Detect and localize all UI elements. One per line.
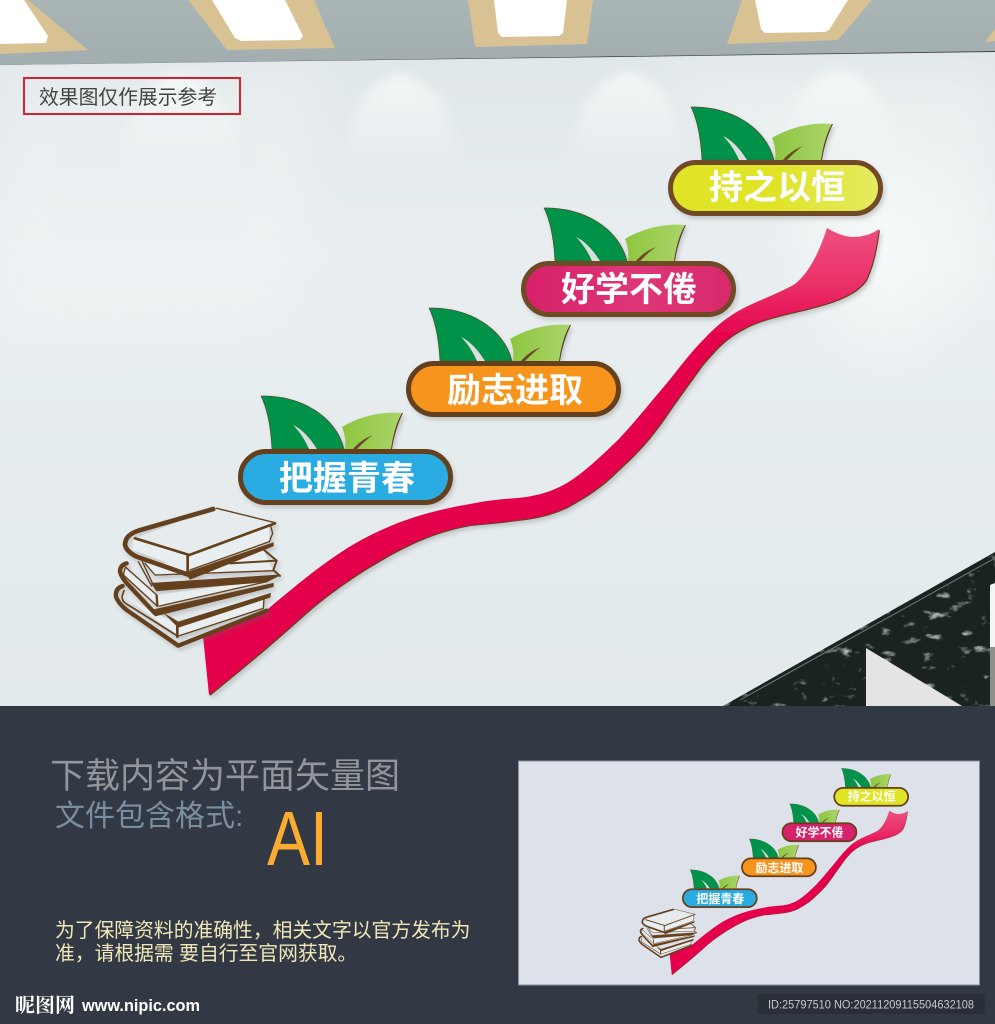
ceiling light 5	[985, 29, 995, 42]
watermark logo	[15, 989, 200, 1018]
watermark logo: www.nipic.com	[81, 996, 200, 1015]
wall	[0, 52, 995, 706]
disclaimer text	[55, 920, 470, 965]
image id tag	[758, 994, 985, 1014]
thumbnail step 4: 持之以恒	[848, 789, 896, 804]
pill label: 持之以恒	[709, 169, 845, 207]
pill	[670, 162, 880, 214]
ceiling light 2	[188, 0, 335, 50]
thumbnail artwork	[639, 768, 908, 975]
bottom info panel	[0, 706, 995, 1024]
notice box: 效果图仅作展示参考	[39, 87, 217, 109]
ceiling	[0, 0, 995, 65]
thumbnail step 3	[782, 804, 856, 841]
pill	[240, 452, 450, 502]
leaves	[261, 396, 403, 449]
preview thumbnail	[518, 761, 980, 985]
pill	[408, 364, 618, 414]
step 2: 励志进取	[408, 308, 618, 414]
thumbnail step 3: 好学不倦	[796, 824, 844, 839]
step 3: 好学不倦	[524, 208, 734, 314]
leaves	[544, 208, 686, 261]
notice box	[24, 78, 240, 114]
ceiling light 1	[0, 0, 88, 54]
black marble counter	[723, 552, 995, 706]
thumbnail step 4	[834, 768, 908, 806]
watermark logo: 昵图网	[15, 989, 75, 1018]
pill label: 励志进取	[447, 372, 583, 410]
ribbon path	[203, 228, 880, 696]
format value AI: AI	[267, 796, 328, 882]
wall spotlights	[122, 70, 898, 170]
thumbnail step 2	[742, 839, 816, 876]
step 1: 把握青春	[240, 396, 450, 502]
image id tag: ID:25797510 NO:20211209115504632108	[768, 998, 974, 1012]
icon: stack of books	[116, 508, 280, 646]
ceiling light 4	[727, 0, 872, 44]
thumbnail step 1	[683, 870, 757, 907]
thumbnail background	[518, 761, 980, 985]
disclaimer text: 准，请根据需 要自行至官网获取。	[55, 943, 357, 965]
thumbnail ribbon	[670, 811, 908, 975]
ceiling light 3	[468, 0, 593, 47]
pill label: 好学不倦	[561, 271, 697, 309]
thumbnail step 2: 励志进取	[756, 860, 803, 875]
disclaimer text: 为了保障资料的准确性，相关文字以官方发布为	[55, 920, 470, 942]
pill	[524, 264, 734, 314]
heading: flat vector download: 下载内容为平面矢量图	[50, 757, 400, 796]
thumbnail step 1: 把握青春	[696, 891, 744, 906]
room background	[0, 0, 995, 706]
leaves	[691, 107, 833, 160]
step 4: 持之以恒	[670, 107, 880, 214]
leaves	[429, 308, 571, 361]
thumbnail books	[639, 909, 697, 957]
file format label: 文件包含格式:	[55, 800, 243, 833]
pill label: 把握青春	[279, 460, 415, 498]
